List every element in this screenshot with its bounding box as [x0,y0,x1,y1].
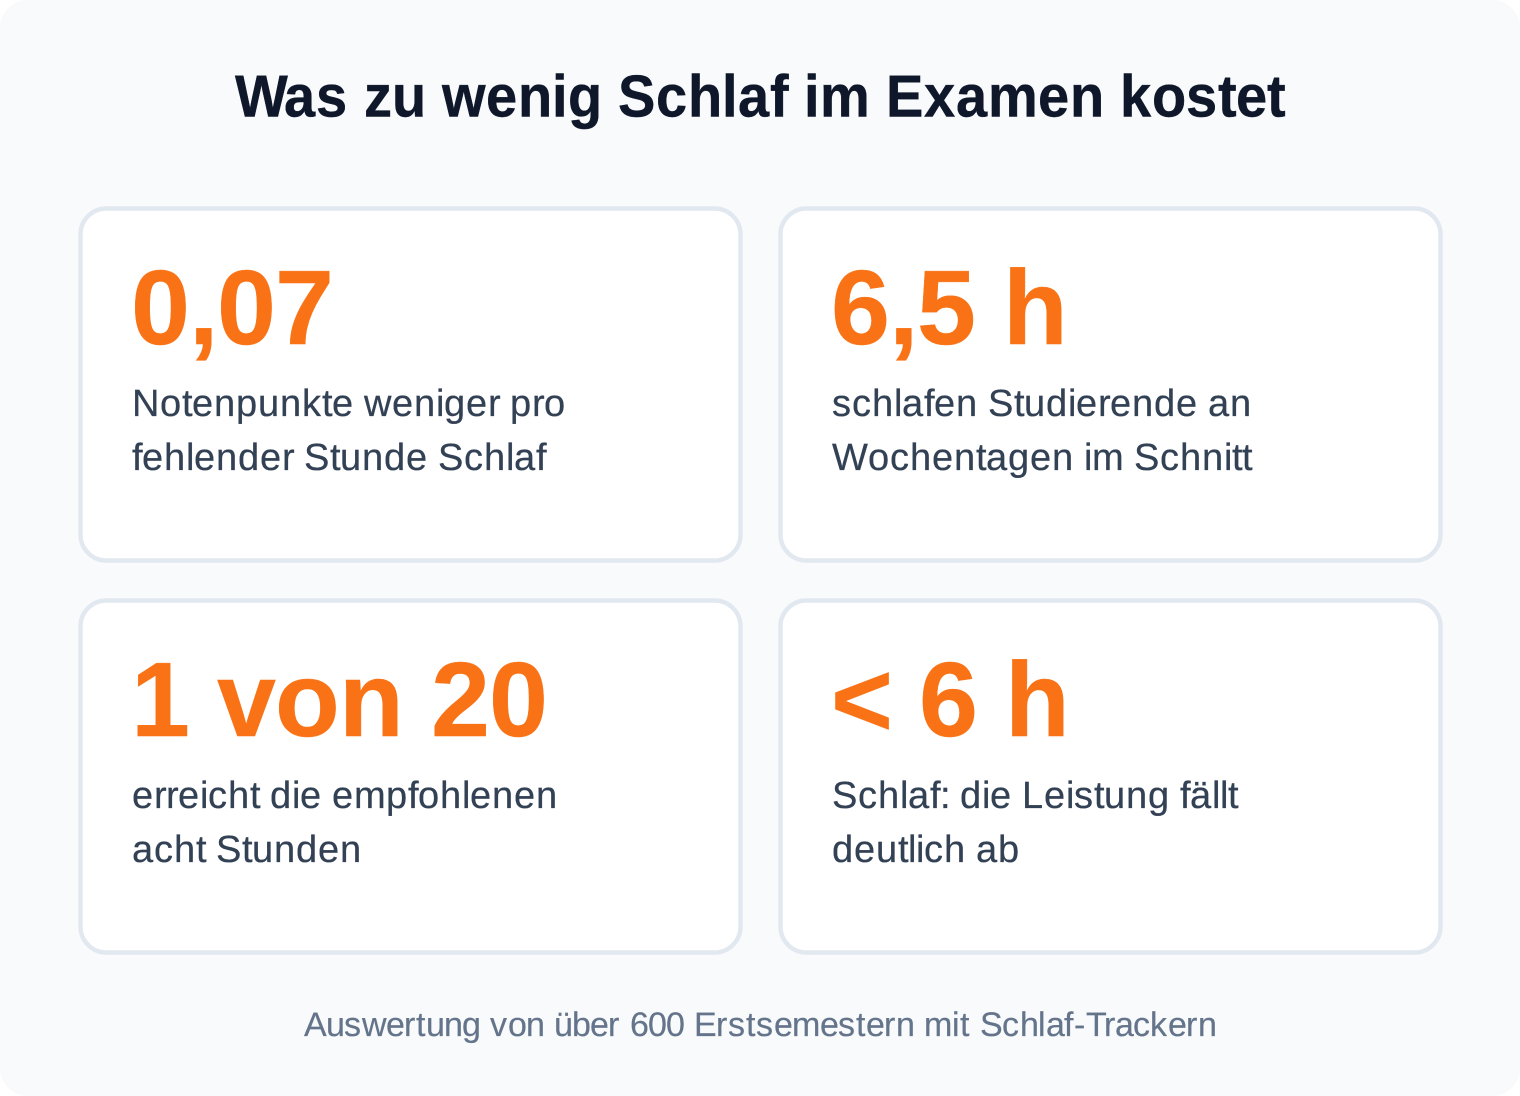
panel: card 6,5 h [780,208,1440,560]
stat description: Studierende: Wochentagen im Schnitt [832,437,1253,479]
stat description: acht Stunden: erreicht die empfohlenen [132,775,557,817]
stat description: Notenpunkte: fehlender Stunde Schlaf [132,437,547,479]
stat description: acht Stunden: acht Stunden [132,829,361,871]
title: Was zu wenig Schlaf im Examen kostet [235,62,1286,129]
panel: card 0,07 [80,208,740,560]
stat description: Notenpunkte: Notenpunkte weniger pro [132,383,565,425]
stat description: Notenpunkte [132,383,565,479]
stat number: < 6 h: < 6 h [831,641,1070,759]
stat description: Leistung: deutlich ab [832,829,1019,871]
panel: card 1 von 20 [80,600,740,952]
stat description: Leistung: Schlaf: die Leistung fällt [832,775,1239,817]
stat number: 0,07: 0,07 [131,249,334,367]
footnote: Auswertung von über 600 Erstsemestern mit Schlaf-Trackern [304,1006,1217,1044]
panel: card < 6 h [780,600,1440,952]
stat number: 1 von 20: 1 von 20 [131,641,548,759]
stat description: acht Stunden [132,775,557,871]
stat description: Studierende [832,383,1253,479]
stat description: Studierende: schlafen Studierende an [832,383,1251,425]
stat number: 6,5 h: 6,5 h [831,249,1068,367]
stat description: Leistung [832,775,1239,871]
